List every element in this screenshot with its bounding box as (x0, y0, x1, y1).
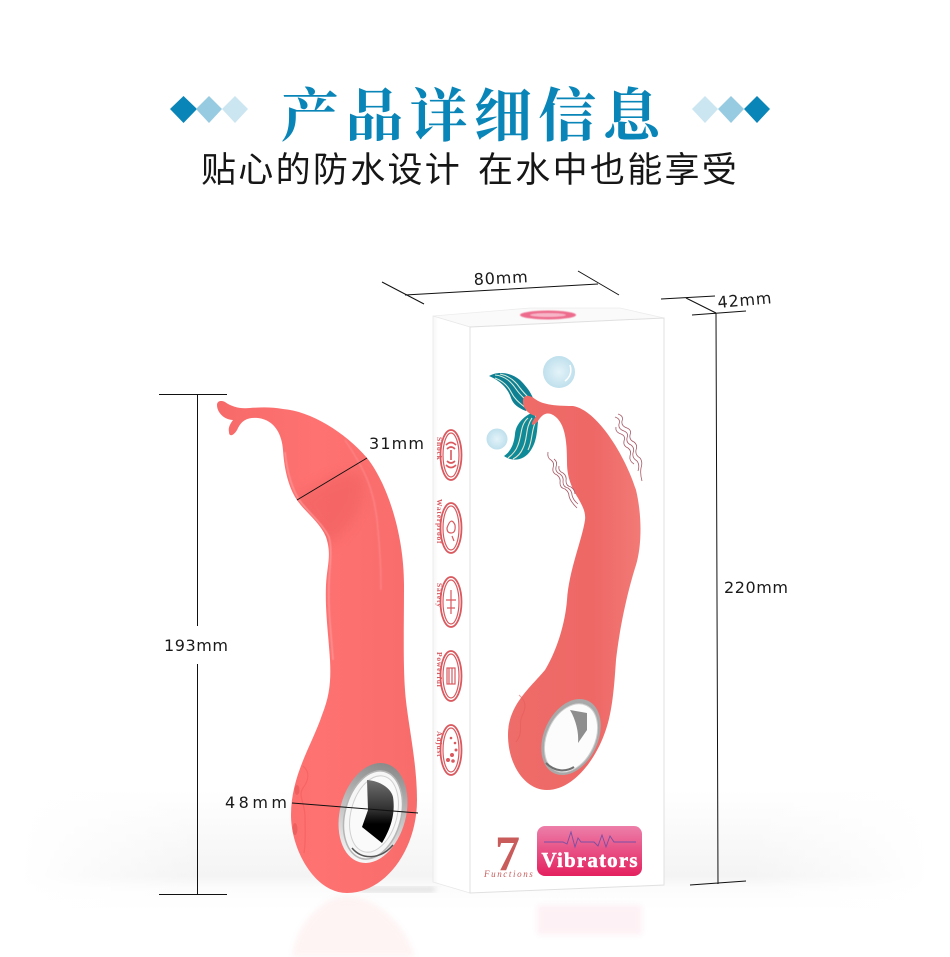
seven functions mark: 7 (495, 825, 520, 881)
side feature icons (440, 430, 462, 775)
dimension: box height 220mm (690, 311, 788, 885)
body shading (285, 440, 381, 660)
seven functions mark (483, 825, 534, 881)
title: 产品详细信息 (281, 69, 667, 153)
mermaid tail (489, 373, 538, 460)
icon: safety (440, 577, 462, 627)
decorative diamonds right (692, 96, 770, 123)
box reflection (537, 905, 642, 935)
dimension: 31mm width (297, 434, 424, 500)
product body (508, 396, 640, 790)
package box (433, 308, 664, 893)
box front face (470, 318, 664, 893)
upper fin (489, 373, 533, 411)
dimension: 31mm width: 31mm (369, 434, 424, 453)
icon: adjust (440, 725, 462, 775)
reflection of product (292, 896, 415, 957)
side feature labels: Adjust (435, 731, 444, 757)
lower fin (504, 412, 538, 460)
top logo (520, 310, 576, 320)
box side face (433, 316, 470, 893)
dimension: box depth 42mm (661, 288, 772, 313)
metal button (530, 689, 612, 785)
vibrators badge: Vibrators (542, 848, 638, 872)
box top face (433, 308, 664, 327)
side feature labels: Shock (435, 437, 444, 461)
metal button (328, 755, 418, 871)
heading block (170, 69, 770, 190)
icon: shock (440, 430, 462, 480)
product: box view (508, 396, 640, 790)
side feature labels: Waterproof (435, 499, 444, 544)
product: left view (217, 401, 418, 893)
side feature labels: Powerful (435, 652, 444, 688)
icon: powerful (440, 651, 462, 701)
dimension: 48mm base: 48mm (225, 793, 287, 812)
product body (217, 401, 417, 893)
decorative diamonds left (170, 96, 248, 123)
vibrators badge (537, 826, 642, 876)
icon: waterproof (440, 503, 462, 553)
dimension: box width 80mm: 80mm (473, 267, 528, 289)
dimension: 48mm base (225, 793, 418, 813)
dimension: box depth 42mm: 42mm (717, 288, 772, 312)
subtitle: 贴心的防水设计 (201, 151, 462, 190)
dimension: product height 193mm (159, 394, 228, 894)
side feature labels: Safety (435, 583, 444, 608)
floor shadow (20, 790, 930, 910)
side buttons (516, 695, 525, 742)
side feature labels (435, 437, 444, 757)
vibration lines (548, 414, 642, 508)
side buttons (292, 766, 308, 853)
dimension: box width 80mm (382, 267, 619, 304)
dimension: box height 220mm: 220mm (724, 578, 788, 597)
subtitle second part: 在水中也能享受 (478, 151, 739, 190)
bubbles (486, 356, 575, 450)
dimension: product height 193mm: 193mm (164, 636, 228, 655)
seven functions mark: Functions (483, 869, 534, 879)
